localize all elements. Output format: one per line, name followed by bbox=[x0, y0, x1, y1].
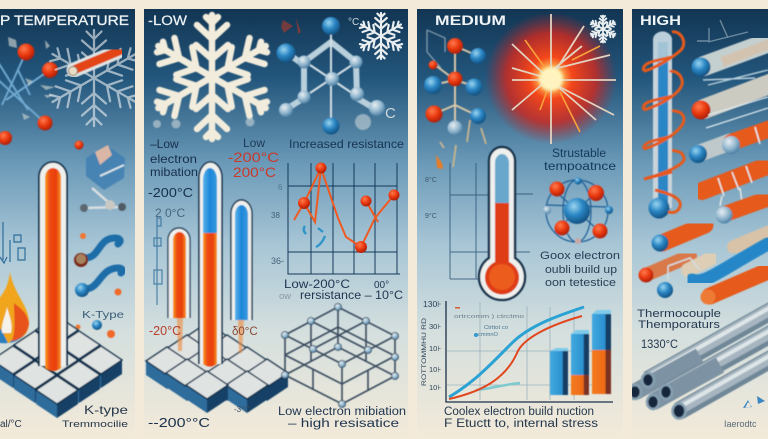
text: low electron migration bbox=[148, 137, 198, 220]
text: good electron build up: Goox electron bbox=[540, 250, 620, 262]
chart y labels bbox=[423, 299, 442, 392]
icon: metal tubes bbox=[629, 302, 768, 418]
icon: snowflake top right bbox=[590, 16, 616, 42]
label: C fragment: C bbox=[385, 105, 396, 122]
bar 3 bbox=[592, 310, 611, 394]
capsule: orange tip beige bbox=[692, 70, 768, 120]
icon: decorative instrument bbox=[697, 20, 748, 42]
text: temperature range in red: -200°C bbox=[228, 149, 279, 165]
text: chart caption: Low-200°C bbox=[284, 279, 350, 291]
icon: thin blue instruments bbox=[0, 222, 25, 263]
label: thermocouple name: Tremmocilie bbox=[62, 419, 128, 430]
capsule: blue tip beige bbox=[692, 40, 768, 76]
text: chart caption bbox=[279, 279, 403, 302]
chart axis title: ROTTOMMHU RD bbox=[421, 318, 428, 386]
heading: MEDIUM bbox=[435, 12, 506, 28]
panel background bbox=[417, 9, 623, 439]
text: low electron migration: –Low bbox=[150, 137, 179, 151]
grid behind thermometer bbox=[450, 163, 533, 279]
text: low electron migration high resistance: – high resisatice bbox=[288, 418, 399, 430]
icon: base blocks bbox=[0, 316, 122, 418]
thermometer: small red bbox=[168, 228, 190, 351]
chart blue line bbox=[449, 307, 584, 397]
panel background bbox=[0, 9, 135, 439]
chart axis labels: 38 bbox=[271, 211, 280, 220]
chart axis labels: 36- bbox=[271, 256, 284, 266]
icon: ice crystal bbox=[80, 145, 126, 212]
text: thermocouple temperatures: Thermocouple bbox=[637, 308, 721, 320]
icon: thin instrument bbox=[154, 218, 162, 305]
axis fragments bbox=[425, 176, 437, 220]
text: good electron build up bbox=[540, 250, 620, 289]
label: 80°C: δ0°C bbox=[232, 326, 258, 338]
capsule: orange bottom bbox=[700, 268, 768, 304]
chart legend bbox=[454, 314, 524, 338]
tube: blue curved bbox=[692, 240, 768, 281]
text: temperature range in red bbox=[228, 138, 278, 177]
axis fragments: 8°C bbox=[425, 176, 437, 184]
text: low electron migration: -200°C bbox=[148, 185, 193, 200]
text: chart caption: rersistance – 10°C bbox=[300, 290, 403, 302]
text: temperature range in red: 200°C bbox=[233, 164, 276, 180]
label: K-Type: K-Type bbox=[82, 310, 125, 321]
chart data line bbox=[293, 172, 392, 244]
icon: hexagonal molecule bbox=[276, 17, 385, 134]
panel background bbox=[144, 9, 408, 439]
decorative crystal specks bbox=[281, 18, 301, 34]
text: temperature range in red: Low bbox=[243, 136, 265, 150]
text: low electron migration high resistance: Low electron mibiation bbox=[278, 406, 406, 418]
chart y labels: 10⊦ bbox=[429, 344, 441, 353]
icon: large snowflake bbox=[150, 15, 274, 139]
bar 1 bbox=[550, 348, 568, 395]
line chart: resistance bbox=[271, 162, 400, 274]
label: thermocouple name bbox=[62, 406, 128, 427]
chart y labels: 130⊦ bbox=[423, 299, 442, 309]
rod with helix coil bbox=[643, 32, 684, 218]
text: caption cooler electron: F Etuctt to, internal stress bbox=[444, 418, 598, 430]
chart axis labels bbox=[271, 183, 284, 266]
panel: medium bbox=[417, 9, 623, 439]
label: -3°C: -3°C bbox=[234, 405, 250, 414]
text: thermocouple temperatures bbox=[637, 308, 721, 351]
text: caption cooler electron: Coolex electron build nuction bbox=[444, 406, 594, 418]
bar 2 bbox=[571, 330, 589, 395]
starburst bbox=[485, 12, 617, 144]
panel: high bbox=[629, 9, 768, 439]
icon: base blocks bbox=[146, 323, 288, 413]
capsule: orange short bbox=[638, 256, 712, 298]
label: temperature fragment: al/°C bbox=[0, 419, 22, 430]
text: thermocouple temperatures: 1330°C bbox=[641, 337, 678, 351]
chart data points bbox=[298, 162, 400, 253]
label: fragment °C near molecule: °C bbox=[348, 17, 359, 28]
text: low electron migration: 2 0°C bbox=[155, 206, 185, 220]
text: low electron migration high resistance bbox=[278, 406, 406, 430]
text: chart caption: ow bbox=[279, 291, 291, 302]
chart blue marks bbox=[304, 226, 325, 247]
icon: flame bbox=[0, 272, 29, 343]
chart legend: Ctrttot co bbox=[484, 325, 508, 331]
thermometer: small blue bbox=[231, 200, 252, 353]
capsule: gray tip orange rod bbox=[716, 196, 768, 224]
panel background bbox=[632, 9, 768, 439]
thermometer: tall blue and orange bbox=[199, 162, 222, 366]
text: thermocouple temperatures: Themporaturs bbox=[638, 319, 721, 331]
heading: HIGH bbox=[640, 12, 681, 28]
panel: low temperature overview bbox=[0, 9, 142, 439]
capsule: blue tip orange bbox=[689, 97, 768, 163]
text: good electron build up: oubli build up bbox=[545, 264, 617, 276]
text: chart caption: 00° bbox=[374, 280, 389, 291]
chart y labels: 10⊦ bbox=[429, 383, 441, 392]
icon: molecule with red atoms bbox=[0, 37, 84, 150]
text: suitable temperature bbox=[544, 148, 616, 173]
label: increased resistance: Increased resistance bbox=[289, 137, 404, 151]
chart legend: ortrcomm ) ctrctmo bbox=[454, 314, 524, 320]
chart teal line bbox=[476, 383, 520, 390]
text: low electron migration: mibation bbox=[150, 165, 198, 179]
icon: red and blue molecule bbox=[424, 30, 486, 169]
axis fragments: 9°C bbox=[425, 212, 437, 220]
icon: small colored marks bbox=[743, 396, 765, 408]
small snow specks bbox=[153, 114, 371, 130]
icon: snowflake top right bbox=[358, 13, 404, 59]
chart: electron build up with bars bbox=[421, 299, 613, 402]
chart y labels: 30⊦ bbox=[429, 322, 441, 331]
chart legend: cmmnO bbox=[478, 332, 499, 338]
capsule: blue tip orange lower bbox=[652, 225, 768, 252]
text: suitable temperature: Strustable bbox=[552, 148, 606, 160]
icon: crystal lattice bbox=[282, 304, 398, 408]
text: caption cooler electron bbox=[444, 406, 598, 430]
label: thermocouple name: K-type bbox=[84, 405, 128, 417]
icon: red capsule bbox=[68, 51, 119, 76]
chart y labels: 10⊦ bbox=[429, 365, 441, 374]
label: -200°C: --200°°C bbox=[148, 415, 210, 430]
icon: blue dumbbell molecules bbox=[74, 233, 122, 338]
text: low electron migration: electron bbox=[150, 152, 197, 166]
text: suitable temperature: tempoatnce bbox=[544, 161, 616, 173]
icon: atom cluster bbox=[543, 178, 613, 244]
legend markers bbox=[455, 307, 478, 337]
heading: P TEMPERATURE bbox=[0, 13, 129, 28]
capsule: orange rod with coil bbox=[702, 163, 768, 206]
panel: low bbox=[144, 9, 408, 439]
thermometer: medium bbox=[479, 147, 525, 300]
heading: -LOW bbox=[148, 13, 187, 28]
text: good electron build up: oon tetestice bbox=[545, 277, 616, 289]
label: -20°C: -20°C bbox=[149, 324, 181, 338]
chart red line bbox=[449, 316, 582, 399]
thermometer: red bbox=[39, 162, 67, 371]
label: fragment: Iaerodtc bbox=[724, 419, 757, 429]
icon: snowflake bbox=[46, 30, 142, 126]
chart axis labels: 6 bbox=[278, 183, 283, 192]
